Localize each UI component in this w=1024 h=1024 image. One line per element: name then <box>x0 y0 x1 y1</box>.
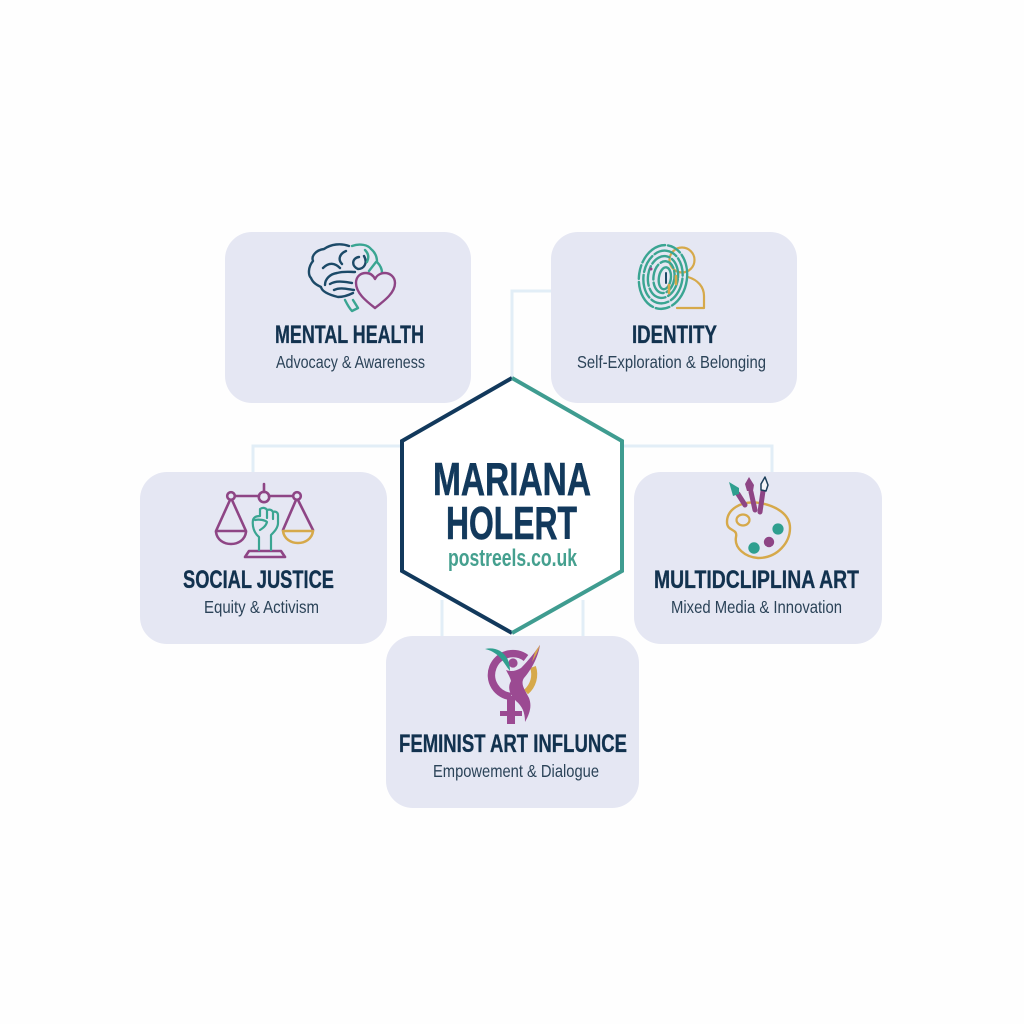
heading: MULTIDCLIPLINA ART <box>654 566 859 594</box>
icon: feminist symbol <box>485 645 540 724</box>
icon: fingerprint and person <box>635 242 704 312</box>
subtitle: Empowement & Dialogue <box>433 761 599 781</box>
icon: scales and fist <box>216 484 313 557</box>
subtitle: Mixed Media & Innovation <box>671 597 842 617</box>
panel: multidisciplinary art <box>634 472 882 644</box>
website: postreels.co.uk <box>448 545 577 572</box>
heading: SOCIAL JUSTICE <box>183 566 334 594</box>
icon: brain and heart <box>309 244 395 311</box>
heading: IDENTITY <box>632 321 717 349</box>
subtitle: Advocacy & Awareness <box>276 352 425 372</box>
central hexagon <box>402 378 622 633</box>
icon: palette and brushes <box>727 477 790 558</box>
subtitle: Self-Exploration & Belonging <box>577 352 766 372</box>
panel: feminist art influence <box>386 636 639 808</box>
name: MARIANA <box>433 453 591 505</box>
heading: FEMINIST ART INFLUNCE <box>399 730 627 758</box>
panel: social justice <box>140 472 387 644</box>
connector lines <box>253 291 772 637</box>
subtitle: Equity & Activism <box>204 597 319 617</box>
heading: MENTAL HEALTH <box>275 321 424 349</box>
panel: identity <box>551 232 797 403</box>
panel: mental health <box>225 232 471 403</box>
name second line: HOLERT <box>446 497 577 549</box>
